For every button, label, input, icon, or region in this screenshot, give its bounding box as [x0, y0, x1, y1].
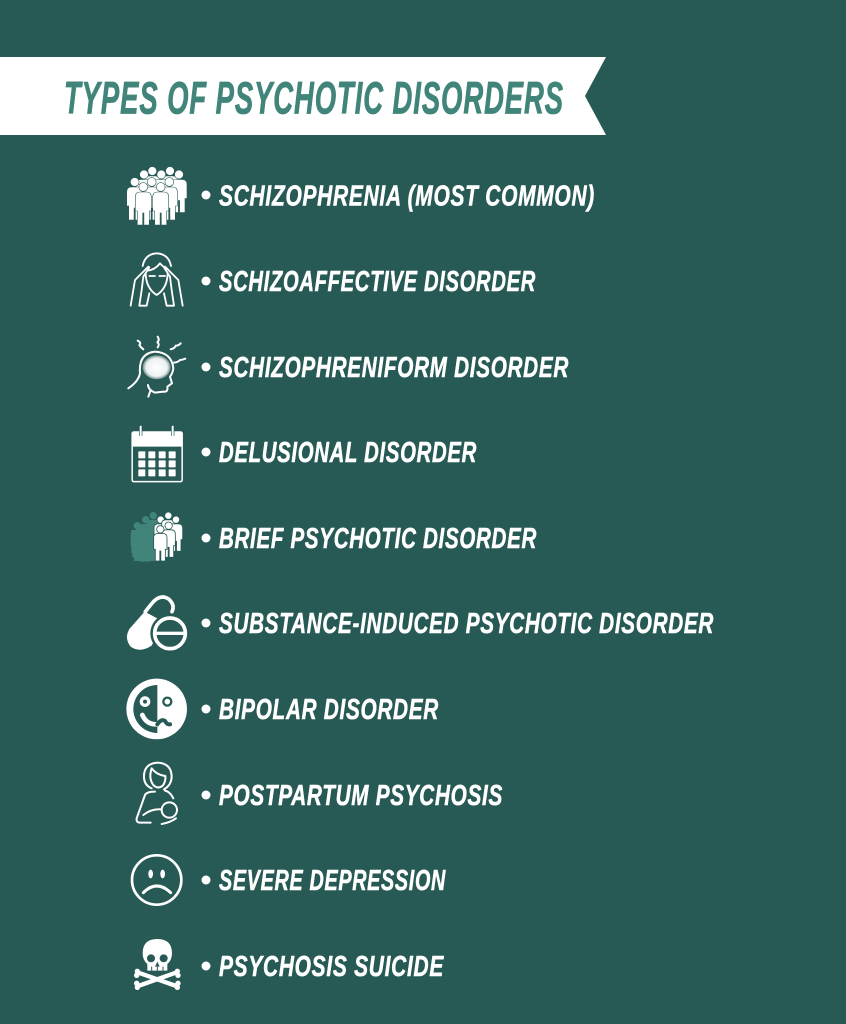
bullet [202, 276, 210, 286]
icon: skull and crossbones [134, 939, 181, 990]
label: POSTPARTUM PSYCHOSIS [219, 780, 503, 812]
bullet [202, 962, 210, 970]
row: schizophreniform disorder [128, 337, 569, 397]
bullet [202, 534, 210, 542]
row: severe depression [132, 855, 446, 905]
title banner [0, 57, 606, 135]
label: SCHIZOPHRENIA (MOST COMMON) [219, 180, 595, 212]
icon: crowd [127, 167, 187, 225]
label: DELUSIONAL DISORDER [219, 437, 477, 469]
bullet [202, 448, 210, 456]
bullet [202, 704, 210, 714]
icon: half-faded crowd [131, 512, 183, 562]
row: schizoaffective disorder [131, 253, 536, 306]
label: SEVERE DEPRESSION [219, 865, 446, 897]
row: delusional disorder [132, 427, 477, 482]
label: BIPOLAR DISORDER [219, 694, 439, 726]
bullet [202, 190, 210, 200]
label: SCHIZOPHRENIFORM DISORDER [219, 352, 569, 384]
bullet [202, 618, 210, 628]
icon: woman holding head [131, 253, 183, 306]
icon: mother and baby [137, 763, 177, 824]
row: bipolar disorder [126, 679, 439, 739]
row: brief psychotic disorder [131, 512, 537, 562]
row: substance-induced psychotic disorder [127, 597, 714, 653]
row: psychosis suicide [134, 939, 444, 990]
icon: calendar [132, 427, 183, 482]
bullet [202, 876, 210, 884]
label: PSYCHOSIS SUICIDE [219, 951, 444, 983]
icon: head with burst [128, 337, 185, 397]
label: BRIEF PSYCHOTIC DISORDER [219, 523, 537, 555]
row: postpartum psychosis [137, 763, 503, 824]
icon: pills [127, 597, 190, 653]
bullet [202, 362, 210, 372]
icon: two-sided face [126, 679, 187, 739]
label: SCHIZOAFFECTIVE DISORDER [219, 266, 536, 298]
icon: sad face [132, 855, 181, 905]
bullet [202, 790, 210, 800]
row: schizophrenia [127, 167, 595, 225]
